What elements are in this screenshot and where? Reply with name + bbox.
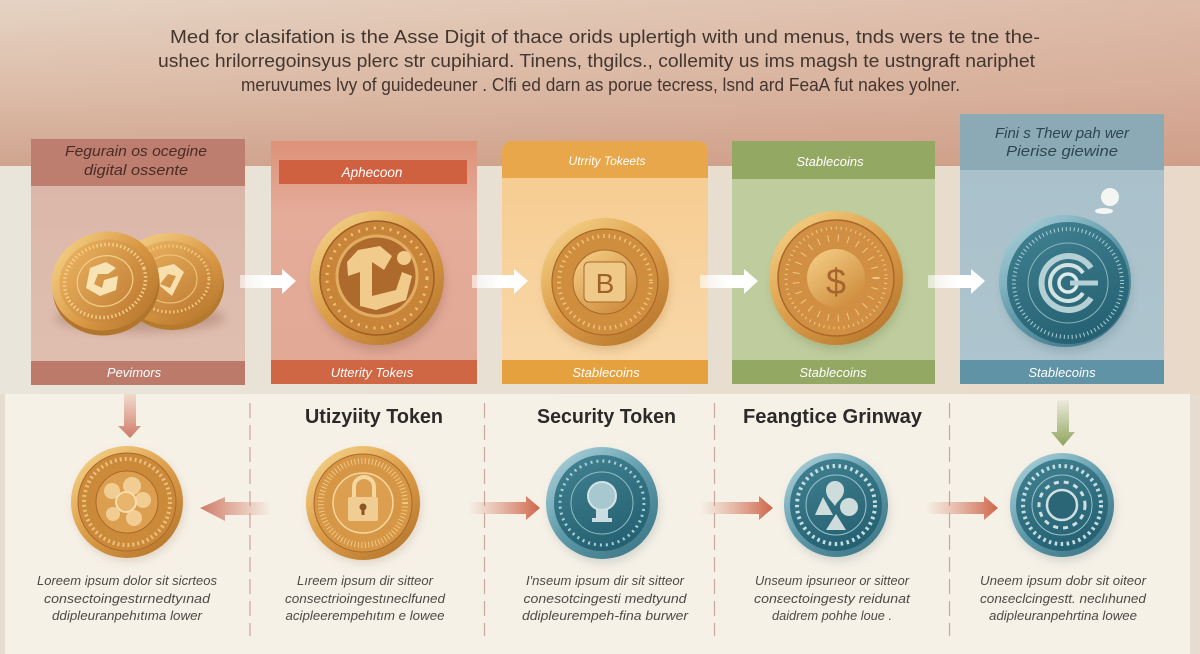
panel: final tokens teal [960, 114, 1164, 384]
icon: gold coin abstract glyph [310, 211, 445, 351]
arrow: panel 4 to 5 [928, 269, 985, 294]
panel 3 header [502, 141, 708, 178]
panel: stablecoins [732, 141, 935, 384]
column 2 description: Lıreem ipsum dir sitteor [297, 574, 434, 588]
panel 3 footer [502, 360, 708, 384]
panel: utility tokens amber [502, 141, 708, 384]
panel 5 header [960, 114, 1164, 170]
arrow: panel 2 to 3 [472, 269, 528, 294]
icon: gold coin with letter B [541, 218, 669, 350]
panel 3 header: Utrrity Tokeets [569, 154, 645, 168]
column 2 description: consectrioingestıneclfuned [285, 592, 446, 606]
column 4 description: Unseum ipsurıeor or sitteor [755, 574, 910, 588]
column 2 description [285, 574, 446, 623]
column 3 heading: Security Token [537, 406, 676, 428]
panel 2 footer [271, 360, 477, 384]
column 4 description [754, 574, 911, 623]
panel 5 header: Fini s Thew pah wer [995, 126, 1130, 142]
intro paragraph [158, 26, 1040, 95]
column 2 heading: Utizyiity Token [305, 406, 443, 428]
icon: pair of gold coins [39, 218, 225, 349]
icon: gold flower coin [71, 446, 184, 561]
icon: small person badge [1095, 188, 1119, 214]
background: top band [0, 0, 1200, 166]
arrow: panel 3 to 4 [700, 269, 758, 294]
column 3 description: I'nseum ipsum dir sit sitteor [526, 574, 685, 588]
panel: token details [5, 394, 1190, 654]
background: lower band [0, 166, 1200, 394]
column 3 description: ddipleurempeh-fina burwer [522, 609, 689, 623]
panel 1 footer [31, 361, 245, 385]
arrow: down to first coin [118, 394, 141, 438]
panel 5 header: Pierise giewine [1006, 144, 1118, 160]
column 1 description: consectoingestırnedtyınad [44, 592, 211, 606]
column 1 description: Loreem ipsum dolor sit sicrteos [37, 574, 217, 588]
icon: gold coin with letter B: B [596, 268, 614, 299]
intro paragraph: meruvumes lvy of guidedeuner . Clfi ed darn as porue tecress, lsnd ard FeaA fut nakes yolner. [241, 74, 960, 95]
column 1 description [37, 574, 217, 623]
panel 4 footer [732, 360, 935, 384]
arrow: right to coin 5 [925, 496, 998, 520]
column 4 description: conεectoingesty reidunat [754, 592, 911, 606]
column 4 heading: Feangtice Grinway [743, 406, 923, 428]
panel 1 header [31, 139, 245, 186]
panel 1 header: Fegurain os ocegine [65, 144, 207, 160]
column 5 description: conεeclcingestt. neclıhuned [980, 592, 1147, 606]
column 5 description: adipleuranpehrtina lowee [989, 609, 1137, 623]
icon: teal coin concentric C [999, 215, 1131, 352]
column 1 description: ddipleuranpehıtıma lower [52, 609, 203, 623]
panel 5 footer [960, 360, 1164, 384]
arrow: left from coin 2 to coin 1 [200, 497, 272, 521]
panel: utility tokens [271, 141, 477, 384]
column 3 description: conesotcingesti medtyund [524, 592, 688, 606]
icon: teal globe coin [546, 447, 659, 563]
column 2 description: acipleerempehıtım e lowee [286, 609, 445, 623]
intro paragraph: ushec hrilorregoinsyus plerc str cupihiard. Tinens, thgilcs., collemity us ims magsh te ustngraft nariphet [158, 50, 1035, 71]
column 4 description: daidrem pohhe loue . [772, 609, 892, 623]
panel 2 header: Aphecoon [341, 165, 402, 180]
icon: gold dollar coin: $ [826, 261, 846, 302]
intro paragraph: Med for clasifation is the Asse Digit of thace orids uplertigh with und menus, tnds wers te tne the- [170, 26, 1040, 47]
icon: gold dollar coin [769, 211, 903, 350]
arrow: green down to last coin [1051, 400, 1075, 446]
icon: teal shapes coin [784, 453, 889, 561]
arrow: panel 1 to 2 [240, 269, 296, 294]
panel 4 header [732, 141, 935, 179]
icon: teal gear coin [1010, 453, 1115, 561]
column 5 description [980, 574, 1147, 623]
panel: digital assets [31, 139, 245, 385]
arrow: right to coin 4 [700, 496, 773, 520]
panel 5 footer: Stablecoins [1028, 365, 1096, 380]
panel 3 footer: Stablecoins [572, 365, 640, 380]
panel 1 header: digital ossente [84, 163, 188, 179]
panel 2 header [279, 160, 467, 184]
column 5 description: Uneem ipsum dobr sit oiteor [980, 574, 1147, 588]
panel 1 footer: Pevimors [107, 365, 162, 380]
arrow: right to coin 3 [468, 496, 540, 520]
icon: gold lock coin [306, 446, 421, 563]
panel 2 footer: Utterity Tokeıs [331, 365, 414, 380]
panel 4 header: Stablecoins [796, 154, 864, 169]
panel 4 footer: Stablecoins [799, 365, 867, 380]
column 3 description [522, 574, 689, 623]
